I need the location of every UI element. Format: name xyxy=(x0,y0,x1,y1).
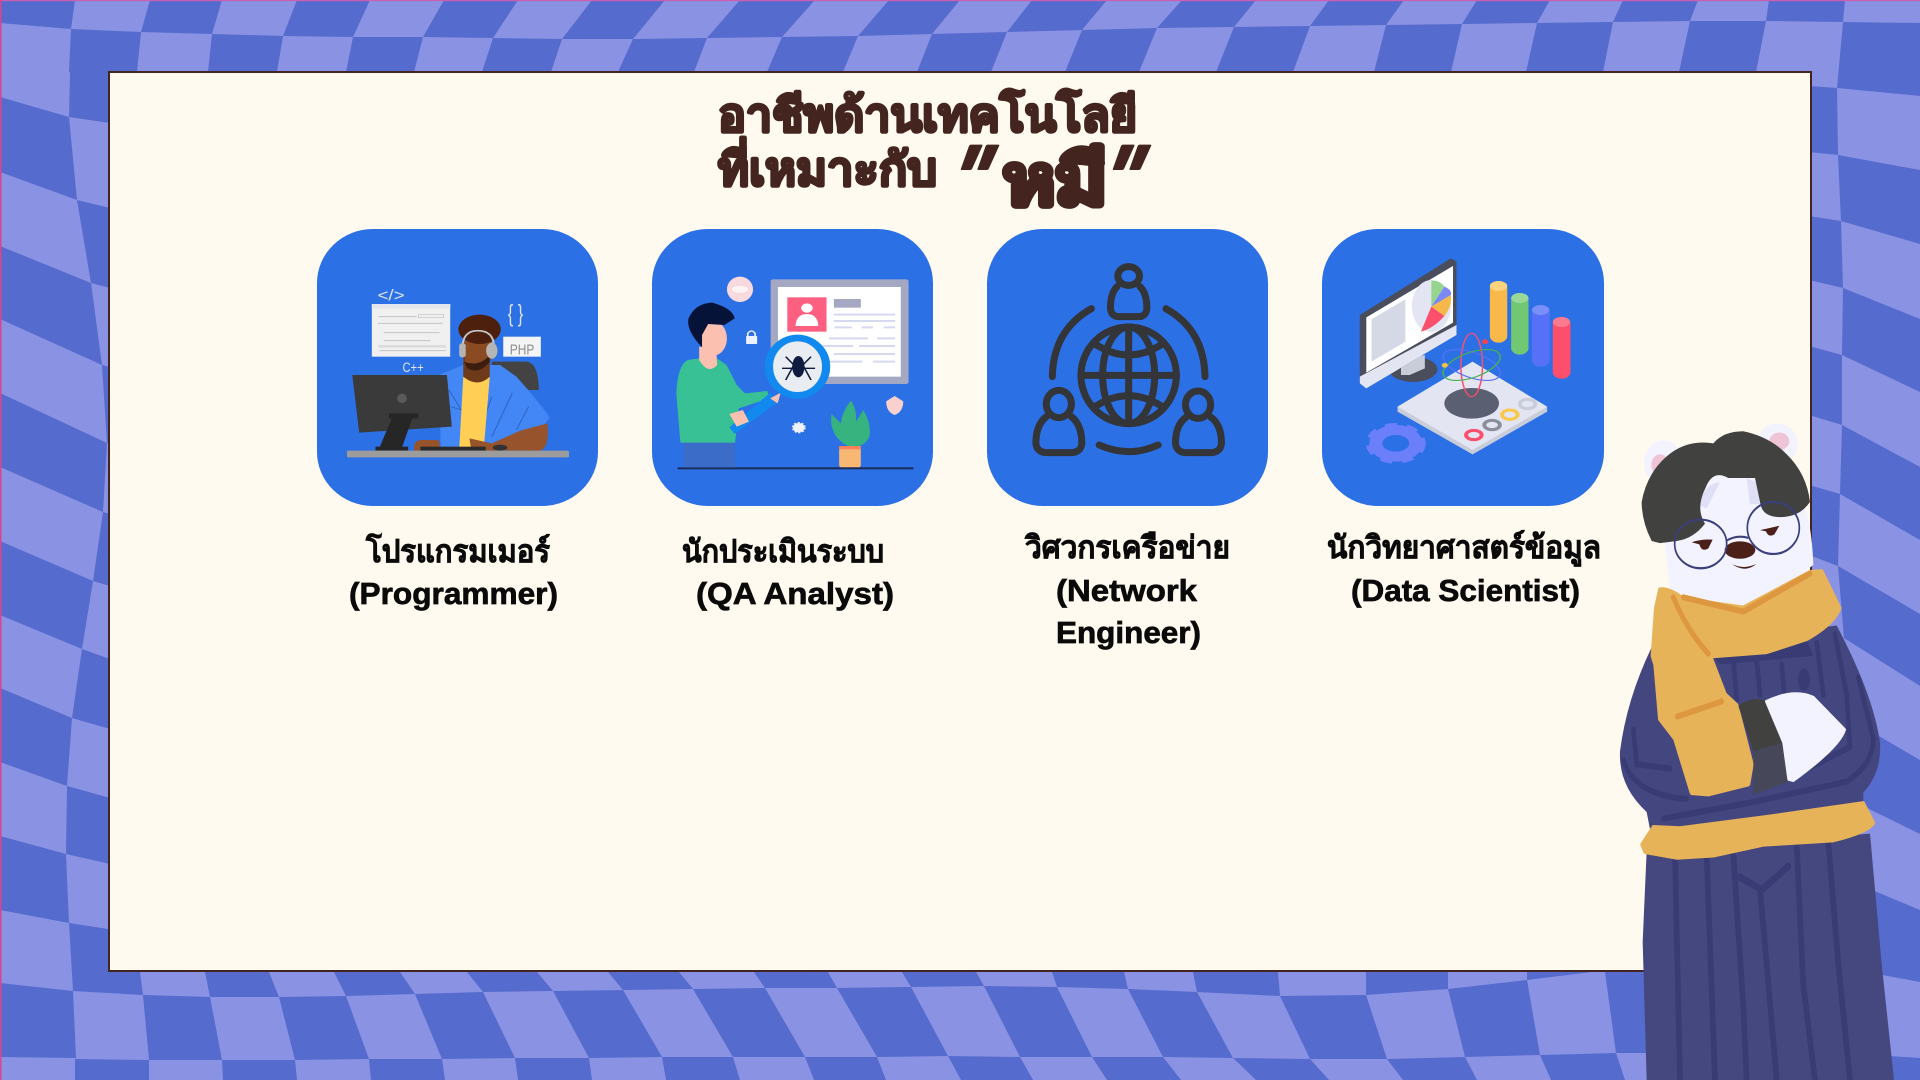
title closing quote: " xyxy=(1084,126,1163,227)
card 1 caption: (Programmer) xyxy=(349,576,558,611)
robe xyxy=(1643,834,1894,1080)
card 3 caption xyxy=(1024,530,1230,650)
hair xyxy=(1642,431,1810,543)
card 1 caption: โปรแกรมเมอร์ xyxy=(365,533,550,569)
panel: cream content board xyxy=(109,72,1811,971)
title xyxy=(718,88,1163,227)
card 4 caption xyxy=(1327,530,1601,608)
card 3 caption: Engineer) xyxy=(1056,615,1201,650)
card 2 caption: นักประเมินระบบ xyxy=(682,534,884,569)
illustration: programmer at desk xyxy=(347,286,569,457)
card 4 caption: (Data Scientist) xyxy=(1351,573,1580,608)
title line 1: อาชีพด้านเทคโนโลยี xyxy=(718,88,1137,141)
ears xyxy=(1644,423,1798,485)
illustration: isometric data workstation xyxy=(1360,258,1571,461)
chart cylinders xyxy=(1490,281,1571,379)
title line 2: ที่เหมาะกับ xyxy=(718,137,937,195)
card 4: data scientist xyxy=(1322,229,1604,506)
scarf xyxy=(1653,572,1839,794)
card 1: programmer xyxy=(317,229,598,506)
card 4 caption: นักวิทยาศาสตร์ข้อมูล xyxy=(1327,530,1601,567)
icon: gear xyxy=(1370,426,1422,461)
eyes, nose, mouth xyxy=(1692,526,1779,569)
illustration: programmer at desk: PHP xyxy=(510,342,534,358)
illustration: programmer at desk: </> xyxy=(377,286,405,304)
glasses xyxy=(1675,502,1799,568)
illustration: programmer at desk: C++ xyxy=(402,360,424,376)
card 2 caption xyxy=(682,534,894,611)
icon: people around globe xyxy=(1036,267,1221,453)
title word: bear: หมี xyxy=(1003,143,1107,219)
card 3 caption: วิศวกรเครือข่าย xyxy=(1024,530,1230,565)
card 1 caption xyxy=(349,533,558,611)
card 3: network engineer xyxy=(987,229,1268,506)
card 3 caption: (Network xyxy=(1056,573,1198,608)
hem band xyxy=(1642,803,1873,858)
illustration: analyst with magnifier xyxy=(676,277,913,469)
cuff and hand xyxy=(1738,699,1783,751)
title opening quote: " xyxy=(932,126,1011,227)
card 2: QA analyst xyxy=(652,229,933,506)
card 2 caption: (QA Analyst) xyxy=(696,576,894,611)
illustration: programmer at desk: { } xyxy=(508,300,523,327)
character: polar bear with glasses and scarf xyxy=(1620,423,1894,1080)
head xyxy=(1663,452,1813,608)
sweater with arms xyxy=(1620,626,1880,838)
